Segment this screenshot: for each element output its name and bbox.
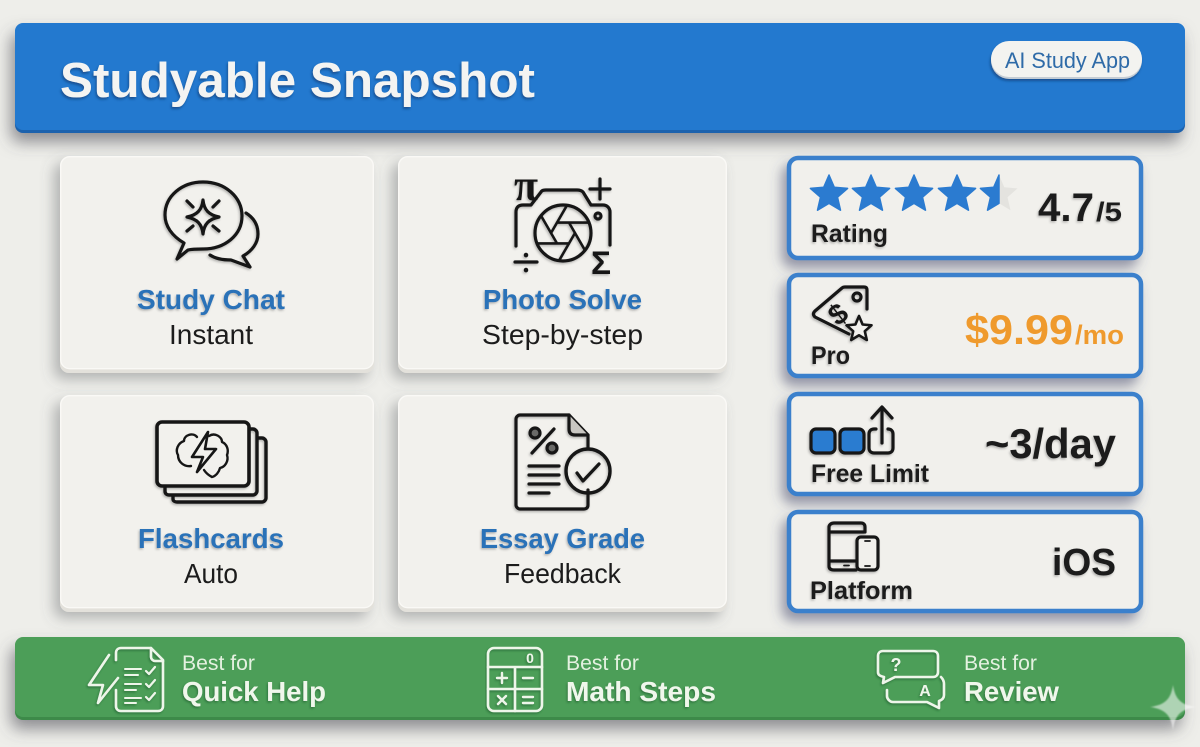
icon: question and answer bubbles: A <box>919 683 931 700</box>
small label: Best for <box>566 652 639 675</box>
stat card: Free Limit <box>789 394 1141 494</box>
badge: AI Study App <box>991 41 1142 79</box>
panel: Photo Solve <box>398 157 727 373</box>
card subtext: Auto <box>184 558 238 589</box>
footer banner <box>15 637 1185 720</box>
value: $9.99 <box>965 306 1073 353</box>
value: iOS <box>1052 542 1116 584</box>
value unit: /5 <box>1096 197 1122 227</box>
icon: star rating <box>810 175 1018 210</box>
label: Platform <box>810 577 913 605</box>
title: Studyable Snapshot <box>60 54 535 108</box>
icon: camera with math symbols <box>514 161 611 281</box>
bold label: Math Steps <box>566 676 716 707</box>
icon: chat bubbles with sparkle <box>165 182 258 267</box>
label: Pro <box>811 342 850 370</box>
watermark sparkle <box>1150 685 1196 730</box>
badge: AI Study App: AI Study App <box>1005 48 1130 73</box>
icon: graded document with check <box>516 415 610 509</box>
icon: bolt and checklist <box>89 648 163 711</box>
icon: price tag with star <box>814 287 872 340</box>
panel: Essay Grade <box>398 396 727 612</box>
icon: question and answer bubbles <box>878 651 944 708</box>
header banner <box>15 23 1185 133</box>
stat card: Platform <box>789 512 1141 611</box>
stat card: Pro <box>789 275 1141 376</box>
card heading: Study Chat <box>137 284 285 315</box>
card subtext: Feedback <box>504 558 621 589</box>
icon: camera with math symbols: Σ <box>591 245 611 281</box>
card heading: Photo Solve <box>483 284 642 315</box>
icon: calculator <box>488 648 542 711</box>
small label: Best for <box>964 652 1037 675</box>
card subtext: Instant <box>169 319 253 350</box>
card heading: Flashcards <box>138 523 284 554</box>
card subtext: Step-by-step <box>482 319 643 350</box>
icon: camera with math symbols: π <box>514 161 538 210</box>
value: ~3/day <box>985 420 1116 467</box>
icon: calculator: 0 <box>526 650 534 666</box>
small label: Best for <box>182 652 255 675</box>
label: Free Limit <box>811 460 930 488</box>
best for: Review <box>878 651 1060 708</box>
panel: Study Chat <box>60 157 374 373</box>
label: Rating <box>811 220 888 248</box>
value unit: /mo <box>1075 320 1124 350</box>
icon: question and answer bubbles: ? <box>890 655 902 675</box>
icon: tablet and phone <box>829 523 878 570</box>
best for: Quick Help <box>89 648 326 711</box>
bold label: Review <box>964 676 1060 707</box>
bold label: Quick Help <box>182 676 326 707</box>
stat card: Rating <box>789 158 1141 258</box>
icon: price tag with star: $ <box>822 297 855 332</box>
value: 4.7 <box>1038 186 1094 230</box>
best for: Math Steps <box>488 648 716 711</box>
icon: stacked flashcards with brain and bolt <box>157 422 266 502</box>
icon: usage squares with upload arrow <box>811 407 893 453</box>
card heading: Essay Grade <box>480 523 645 554</box>
panel: Flashcards <box>60 396 374 612</box>
